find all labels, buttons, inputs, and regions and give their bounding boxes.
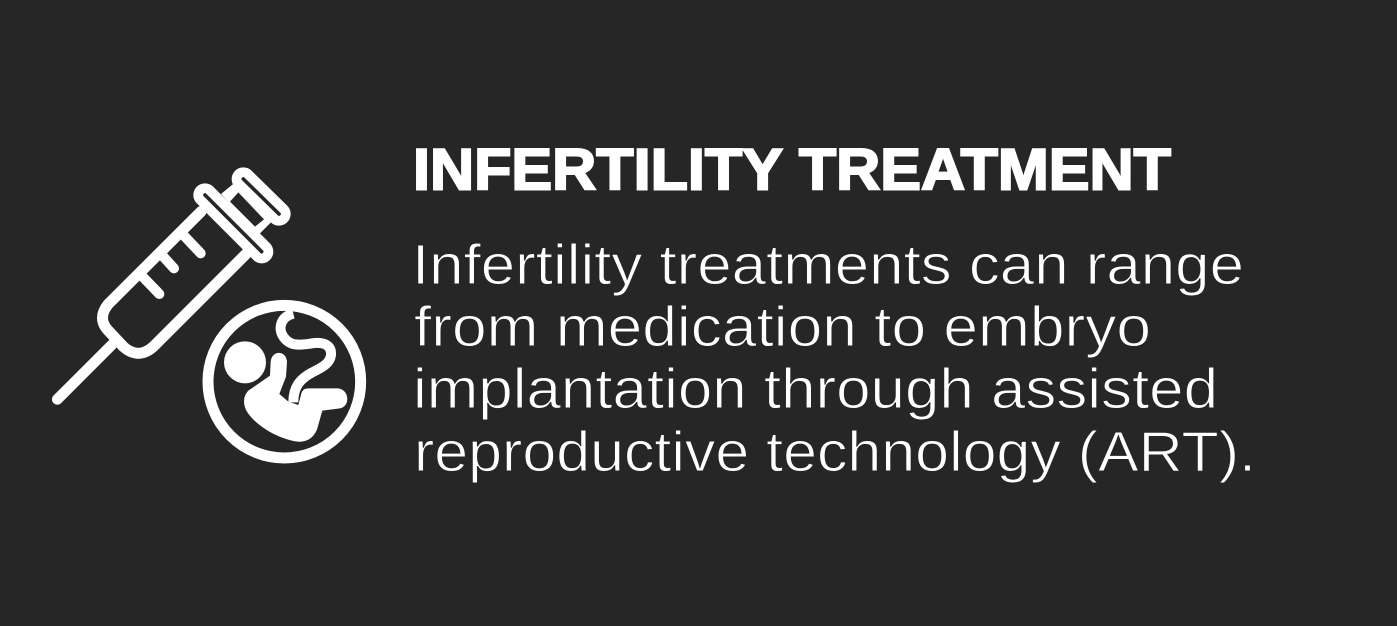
body text: reproductive technology (ART). <box>414 420 1256 484</box>
icon: embryo in circle <box>208 305 361 458</box>
body text <box>412 233 1256 484</box>
body text: from medication to embryo <box>414 295 1151 359</box>
icon: syringe <box>57 178 279 399</box>
body text: Infertility treatments can range <box>412 233 1244 297</box>
title: INFERTILITY TREATMENT <box>413 138 1171 202</box>
body text: implantation through assisted <box>413 357 1218 421</box>
